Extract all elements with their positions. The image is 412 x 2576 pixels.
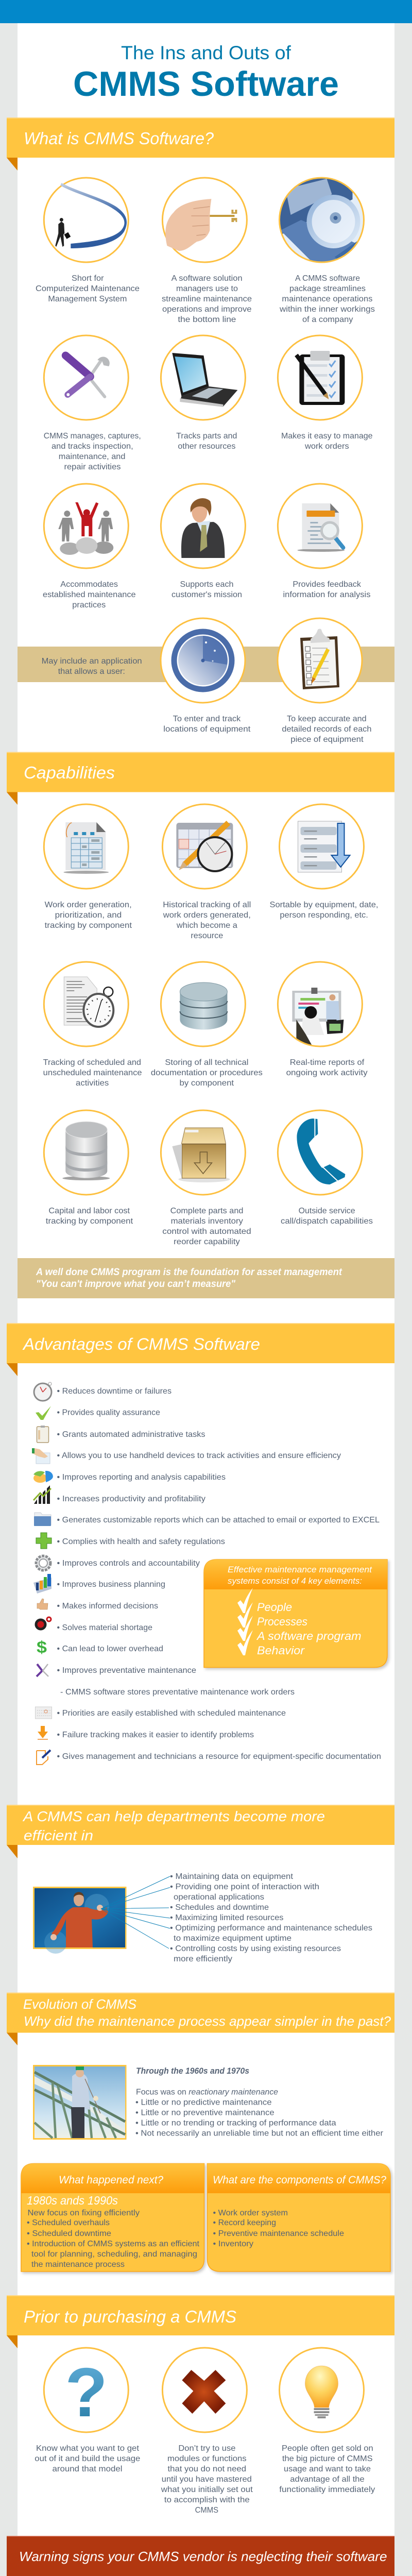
text: sortable: Sortable by equipment, date, bbox=[270, 901, 378, 909]
text: storing documentation bbox=[151, 1058, 263, 1088]
heading ribbon: warning signs: Warning signs your CMMS vendor is neglecting their software bbox=[19, 2549, 387, 2564]
callout: components of CMMS: • Preventive maintenance schedule bbox=[213, 2229, 344, 2238]
icon: radar dial bbox=[161, 618, 245, 703]
heading ribbon: Evolution of CMMS: Evolution of CMMS bbox=[23, 1996, 137, 2012]
list item: business planning: • Improves business planning bbox=[57, 1580, 165, 1589]
callout: components of CMMS bbox=[207, 2164, 390, 2272]
list item: documentation: • Gives management and technicians a resource for equipment-specific documentation bbox=[57, 1752, 381, 1761]
text: software package: within the inner workings bbox=[279, 305, 375, 314]
photo: worker at railing bbox=[33, 2065, 127, 2140]
callout: what happened next: the maintenance process bbox=[31, 2260, 125, 2269]
icon: database bbox=[161, 962, 245, 1046]
text: CMMS manages: maintenance, and bbox=[59, 452, 125, 461]
text: 1960s and 1970s: • Little or no preventive maintenance bbox=[135, 2108, 274, 2117]
heading ribbon: What is CMMS Software? bbox=[7, 117, 394, 171]
photo: man touching virtual screen bbox=[33, 1887, 127, 1954]
icon: orange down arrow bbox=[38, 1726, 48, 1740]
icon: small clipboard bbox=[37, 1426, 48, 1443]
list item: lower overhead: • Can lead to lower overhead bbox=[57, 1645, 163, 1653]
list item: customizable reports: • Generates customizable reports which can be attached to email or exported to EXCEL bbox=[57, 1516, 380, 1524]
text: efficiency list: • Providing one point of interaction with bbox=[170, 1883, 319, 1891]
text: software package: package streamlines bbox=[289, 284, 366, 293]
icon: laptop bbox=[161, 335, 245, 420]
callout: 4 key elements: A software program bbox=[256, 1630, 362, 1642]
callout: 4 key elements: People bbox=[257, 1601, 292, 1614]
icon: growth chart bbox=[33, 1485, 51, 1504]
text: work order generation bbox=[45, 901, 132, 930]
text: work order generation: Work order generation, bbox=[45, 901, 132, 909]
text: provides feedback: information for analysis bbox=[283, 590, 371, 599]
text: tracks parts: Tracks parts and bbox=[176, 432, 237, 440]
text: work orders bbox=[281, 432, 373, 451]
text: enter and track locations: locations of equipment bbox=[163, 725, 251, 734]
text: historical tracking bbox=[163, 901, 251, 940]
list item: quality assurance: • Provides quality assurance bbox=[57, 1409, 160, 1417]
text: accommodates bbox=[43, 580, 136, 609]
text: software solution: streamline maintenance bbox=[162, 295, 252, 303]
icon: green cross bbox=[36, 1533, 52, 1549]
text: short for CMMS: Short for bbox=[72, 274, 104, 283]
text: software package bbox=[279, 274, 375, 324]
text: people often get sold: the big picture of CMMS bbox=[282, 2454, 373, 2463]
text: efficiency list: • Maintaining data on equipment bbox=[170, 1872, 294, 1881]
text: parts and materials: control with automated bbox=[162, 1227, 251, 1236]
icon: telephone handset bbox=[278, 1110, 362, 1195]
icon: laptop and hard drive photo bbox=[279, 178, 368, 266]
text: tracks parts: other resources bbox=[178, 442, 235, 451]
text: short for CMMS bbox=[36, 274, 140, 303]
text: CMMS manages: and tracks inspection, bbox=[52, 442, 133, 451]
callout: what happened next: • Introduction of CMMS systems as an efficient bbox=[27, 2240, 200, 2248]
icon: businessman portrait bbox=[161, 484, 245, 568]
list item: reduces downtime: • Reduces downtime or failures bbox=[57, 1387, 171, 1396]
callout: what happened next: tool for planning, scheduling, and managing bbox=[31, 2250, 197, 2259]
text: storing documentation: documentation or procedures bbox=[151, 1069, 263, 1077]
icon: hand with paper bbox=[32, 1448, 50, 1464]
text: supports each customer bbox=[171, 580, 242, 599]
text: accommodates: Accommodates bbox=[60, 580, 118, 589]
text: software package: maintenance operations bbox=[282, 295, 372, 303]
list item: failure tracking: • Failure tracking makes it easier to identify problems bbox=[57, 1731, 254, 1739]
text: people often get sold: People often get sold on bbox=[282, 2444, 373, 2453]
callout band: may include an application: that allows a user: bbox=[58, 667, 125, 676]
icon: thumbs up bbox=[37, 1599, 48, 1609]
text: work order generation: prioritization, and bbox=[55, 911, 122, 920]
text: software solution: the bottom line bbox=[178, 315, 236, 324]
icon: silver cost database bbox=[44, 1110, 128, 1195]
text: efficiency list: more efficiently bbox=[174, 1955, 232, 1963]
text: capital and labor bbox=[46, 1207, 133, 1226]
icon: classroom whiteboard photo bbox=[278, 962, 362, 1050]
text: know what you want bbox=[35, 2444, 140, 2473]
icon: gear bbox=[36, 1556, 50, 1570]
panel: evolution of CMMS bbox=[7, 1993, 394, 2272]
panel: departments more efficient bbox=[7, 1805, 394, 1963]
callout: what happened next: • Scheduled overhauls bbox=[27, 2218, 110, 2227]
text: supports each customer: customer's mission bbox=[171, 590, 242, 599]
text: enter and track locations: To enter and track bbox=[173, 715, 241, 723]
text: real-time reports: Real-time reports of bbox=[290, 1058, 365, 1067]
callout: 4 key elements: systems consist of 4 key elements: bbox=[228, 1576, 362, 1586]
text: scheduled tracking: activities bbox=[76, 1079, 109, 1088]
text: work orders: Makes it easy to manage bbox=[281, 432, 373, 440]
text: know what you want: Know what you want to get bbox=[36, 2444, 140, 2453]
text: outside service bbox=[281, 1207, 373, 1226]
text: parts and materials: reorder capability bbox=[174, 1238, 240, 1246]
text: don't try modules: modules or functions bbox=[167, 2454, 247, 2463]
icon: document and stopwatch bbox=[44, 962, 128, 1046]
text: efficiency list: • Controlling costs by using existing resources bbox=[170, 1944, 341, 1953]
list item: productivity: • Increases productivity and profitability bbox=[57, 1495, 205, 1503]
text: don't try modules: until you have mastered bbox=[162, 2475, 252, 2484]
text: storing documentation: Storing of all technical bbox=[165, 1058, 248, 1067]
text: work order generation: tracking by component bbox=[45, 921, 132, 930]
text: scheduled tracking: unscheduled maintenance bbox=[43, 1069, 142, 1077]
text: storing documentation: by component bbox=[179, 1079, 234, 1088]
text: 1960s and 1970s: Focus was on reactionary maintenance bbox=[136, 2088, 278, 2097]
icon: calendar bbox=[35, 1707, 52, 1719]
text: efficiency list: operational applications bbox=[174, 1893, 264, 1902]
callout band: asset management quote: A well done CMMS program is the foundation for asset management bbox=[36, 1267, 342, 1278]
heading ribbon: A CMMS can help departments bbox=[7, 1805, 394, 1858]
list item: controls: • Improves controls and accountability bbox=[57, 1559, 200, 1568]
text: work orders: work orders bbox=[304, 442, 349, 451]
text: software solution: managers use to bbox=[176, 284, 238, 293]
icon: screwdriver and wrench bbox=[44, 335, 128, 420]
text: provides feedback bbox=[283, 580, 371, 599]
text: efficiency list: • Schedules and downtime bbox=[170, 1903, 269, 1912]
list item: stores work orders: - CMMS software stores preventative maintenance work orders bbox=[60, 1688, 295, 1697]
title: The Ins and Outs of bbox=[121, 42, 291, 63]
text: scheduled tracking bbox=[43, 1058, 142, 1088]
callout: 4 key elements: Behavior bbox=[257, 1644, 305, 1657]
text: 1960s and 1970s: Through the 1960s and 1970s bbox=[136, 2066, 249, 2076]
icon: green check bbox=[36, 1406, 51, 1420]
text: 1960s and 1970s: • Little or no trending or tracking of performance data bbox=[135, 2119, 336, 2128]
text: software package: of a company bbox=[302, 315, 353, 324]
text: keep accurate records: To keep accurate and bbox=[287, 715, 367, 723]
text: CMMS manages: CMMS manages, captures, bbox=[44, 432, 141, 440]
icon: light bulb bbox=[279, 2348, 364, 2432]
text: outside service: call/dispatch capabilities bbox=[281, 1217, 373, 1226]
text: software package: A CMMS software bbox=[295, 274, 360, 283]
heading ribbon: Advantages: Advantages of CMMS Software bbox=[22, 1335, 260, 1353]
text: keep accurate records bbox=[282, 715, 371, 744]
heading ribbon: A CMMS can help departments: A CMMS can help departments become more bbox=[22, 1808, 325, 1824]
icon: question mark: ? bbox=[65, 2353, 108, 2431]
heading ribbon: warning signs bbox=[7, 2536, 394, 2576]
icon: stopwatch bbox=[34, 1382, 52, 1401]
text: supports each customer: Supports each bbox=[180, 580, 234, 589]
icon: checklist clipboard and pen bbox=[278, 335, 362, 420]
callout: components of CMMS: What are the components of CMMS? bbox=[213, 2174, 386, 2186]
callout: what happened next: 1980s ands 1990s bbox=[27, 2194, 118, 2207]
text: people often get sold: advantage of all the bbox=[290, 2475, 365, 2484]
text: short for CMMS: Management System bbox=[48, 295, 127, 303]
text: efficiency list: to maximize equipment uptime bbox=[174, 1934, 291, 1943]
icon: sortable list with arrow bbox=[279, 804, 364, 889]
list item: reporting: • Improves reporting and analysis capabilities bbox=[57, 1473, 226, 1482]
icon: figures on podium bbox=[44, 484, 128, 568]
text: enter and track locations bbox=[163, 715, 251, 734]
heading ribbon: Prior to purchasing a CMMS bbox=[7, 2295, 394, 2348]
callout band: asset management quote: "You can't improve what you can’t measure" bbox=[36, 1279, 236, 1290]
text: efficiency list: • Maximizing limited resources bbox=[170, 1913, 283, 1922]
text: parts and materials: materials inventory bbox=[171, 1217, 243, 1226]
icon: document with magnifier bbox=[278, 484, 362, 568]
text: software solution: operations and improve bbox=[162, 305, 252, 314]
callout band: may include an application: May include an application bbox=[42, 657, 142, 666]
callout: components of CMMS: • Record keeping bbox=[213, 2218, 276, 2227]
text: don't try modules bbox=[161, 2444, 253, 2515]
text: people often get sold: functionality immediately bbox=[279, 2485, 375, 2494]
callout: what happened next: What happened next? bbox=[59, 2174, 163, 2186]
text: historical tracking: work orders generated, bbox=[163, 911, 251, 920]
callout: components of CMMS: • Work order system bbox=[213, 2209, 288, 2217]
text: scheduled tracking: Tracking of scheduled and bbox=[43, 1058, 141, 1067]
icon: calendar clock and pencil bbox=[162, 804, 247, 889]
icon: document and pen bbox=[37, 1750, 50, 1765]
list item: handheld devices: • Allows you to use handheld devices to track activities and ensure efficiency bbox=[57, 1451, 341, 1460]
text: historical tracking: resource bbox=[191, 931, 223, 940]
text: tracks parts bbox=[176, 432, 237, 451]
callout: what happened next: New focus on fixing efficiently bbox=[28, 2209, 140, 2217]
text: people often get sold: usage and want to take bbox=[284, 2465, 371, 2473]
callout: 4 key elements bbox=[204, 1560, 387, 1667]
icon: businessman and staircase bbox=[44, 178, 128, 262]
title: CMMS Software bbox=[73, 64, 339, 104]
list item: priorities: • Priorities are easily established with scheduled maintenance bbox=[57, 1709, 286, 1718]
text: parts and materials: Complete parts and bbox=[170, 1207, 243, 1215]
text: short for CMMS: Computerized Maintenance bbox=[36, 284, 140, 293]
text: don't try modules: that you do not need bbox=[168, 2465, 246, 2473]
callout band: asset management quote bbox=[18, 1258, 394, 1298]
callout: components of CMMS: • Inventory bbox=[213, 2240, 253, 2248]
text: capital and labor: Capital and labor cost bbox=[48, 1207, 130, 1215]
heading ribbon: Evolution of CMMS: Why did the maintenance process appear simpler in the past? bbox=[24, 2013, 391, 2029]
icon: dollar sign: $ bbox=[37, 1638, 47, 1656]
text: 1960s and 1970s: • Little or no predictive maintenance bbox=[135, 2098, 272, 2107]
icon: red X bbox=[162, 2348, 247, 2432]
text: real-time reports bbox=[286, 1058, 368, 1077]
list item: administrative tasks: • Grants automated administrative tasks bbox=[57, 1430, 205, 1439]
text: don't try modules: what you initially set out bbox=[161, 2485, 253, 2494]
text: don't try modules: Don’t try to use bbox=[178, 2444, 235, 2453]
text: keep accurate records: piece of equipment bbox=[290, 735, 364, 744]
icon: hand turning a key bbox=[162, 178, 247, 262]
text: provides feedback: Provides feedback bbox=[293, 580, 362, 589]
icon: pie chart bbox=[33, 1471, 53, 1483]
callout band: may include an application bbox=[18, 647, 394, 682]
text: know what you want: around that model bbox=[53, 2465, 123, 2473]
panel: advantages of CMMS software bbox=[7, 1323, 394, 1765]
heading ribbon: Capabilities: Capabilities bbox=[24, 763, 115, 782]
text: CMMS manages bbox=[44, 432, 141, 471]
text: efficiency list: • Optimizing performance and maintenance schedules bbox=[170, 1924, 372, 1933]
icon: folder bbox=[34, 1513, 51, 1526]
icon: parts box with arrow bbox=[161, 1110, 245, 1195]
callout: what happened next bbox=[21, 2164, 204, 2272]
text: sortable: person responding, etc. bbox=[280, 911, 368, 920]
text: capital and labor: tracking by component bbox=[46, 1217, 133, 1226]
icon: black and red gears bbox=[36, 1617, 51, 1629]
callout: what happened next: • Scheduled downtime bbox=[27, 2229, 111, 2238]
text: software solution bbox=[162, 274, 252, 324]
text: know what you want: out of it and build the usage bbox=[35, 2454, 140, 2463]
heading ribbon: Evolution of CMMS bbox=[7, 1993, 394, 2045]
text: CMMS manages: repair activities bbox=[64, 463, 121, 471]
heading ribbon: What is CMMS Software?: What is CMMS Software? bbox=[24, 129, 214, 148]
text: people often get sold bbox=[279, 2444, 375, 2494]
heading ribbon: Capabilities bbox=[7, 752, 394, 805]
text: outside service: Outside service bbox=[299, 1207, 355, 1215]
text: don't try modules: CMMS bbox=[195, 2506, 218, 2515]
icon: records clipboard and pencil bbox=[278, 618, 362, 703]
list item: informed decisions: • Makes informed decisions bbox=[57, 1602, 158, 1611]
icon: work order table document bbox=[44, 804, 128, 889]
list item: material shortage: • Solves material shortage bbox=[57, 1623, 152, 1632]
list item: health and safety: • Complies with health and safety regulations bbox=[57, 1537, 225, 1546]
panel: prior to purchasing bbox=[7, 2295, 394, 2515]
heading ribbon: Prior to purchasing a CMMS: Prior to purchasing a CMMS bbox=[24, 2307, 236, 2326]
text: keep accurate records: detailed records of each bbox=[282, 725, 371, 734]
text: historical tracking: Historical tracking of all bbox=[163, 901, 251, 909]
text: sortable bbox=[270, 901, 378, 920]
text: parts and materials bbox=[162, 1207, 251, 1246]
callout: 4 key elements: Effective maintenance management bbox=[228, 1565, 372, 1574]
text: 1960s and 1970s: • Not necessarily an unreliable time but not an efficient time either bbox=[135, 2129, 384, 2138]
text: accommodates: practices bbox=[72, 601, 106, 609]
text: historical tracking: which become a bbox=[176, 921, 237, 930]
heading ribbon: A CMMS can help departments: efficient in bbox=[24, 1827, 93, 1843]
text: don't try modules: to accomplish with the bbox=[164, 2496, 250, 2504]
text: real-time reports: ongoing work activity bbox=[286, 1069, 368, 1077]
list item: preventative maintenance: • Improves preventative maintenance bbox=[57, 1666, 196, 1675]
panel: warning signs bbox=[7, 2536, 394, 2576]
icon: question mark bbox=[44, 2348, 128, 2432]
text: software solution: A software solution bbox=[171, 274, 243, 283]
text: efficiency list bbox=[170, 1872, 372, 1963]
text: 1960s and 1970s bbox=[135, 2066, 384, 2138]
panel: what is CMMS software bbox=[7, 117, 394, 744]
title bbox=[73, 42, 339, 104]
text: accommodates: established maintenance bbox=[43, 590, 136, 599]
icon: 3D bar chart bbox=[33, 1574, 52, 1594]
heading ribbon: Advantages bbox=[7, 1323, 394, 1376]
icon: small tools bbox=[37, 1664, 48, 1676]
connector lines from hand to list bbox=[101, 1876, 170, 1948]
panel: capabilities bbox=[7, 752, 394, 1298]
callout: 4 key elements: Processes bbox=[257, 1615, 307, 1628]
